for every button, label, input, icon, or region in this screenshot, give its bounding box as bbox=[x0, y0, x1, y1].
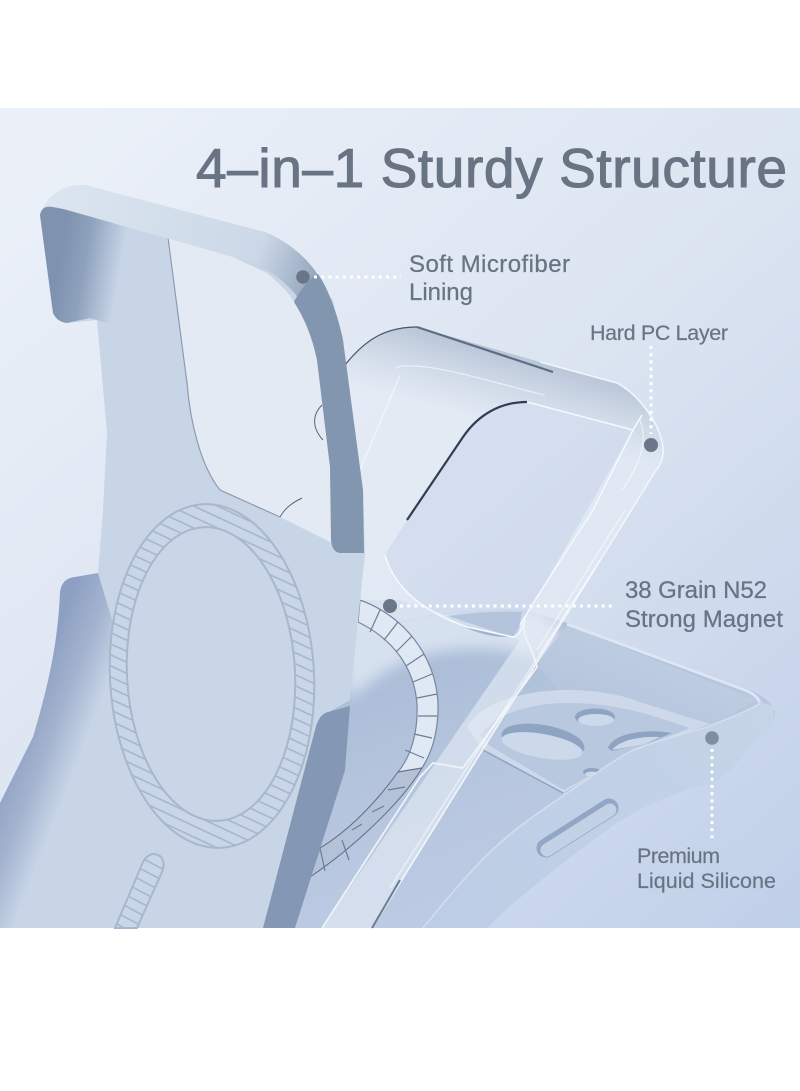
label: liquid silicone: Premium bbox=[637, 844, 720, 868]
clear PC case bbox=[322, 327, 663, 928]
title: 4–in–1 Sturdy Structure bbox=[196, 137, 787, 199]
label: magnet: 38 Grain N52 bbox=[625, 577, 767, 604]
right outer edge bbox=[372, 362, 663, 928]
window opening in lining bbox=[167, 237, 332, 543]
side wall bbox=[537, 625, 757, 750]
camera island bbox=[467, 690, 710, 793]
camera hole: large bbox=[499, 718, 587, 765]
near wall band bbox=[423, 702, 774, 928]
long strip line bbox=[390, 560, 600, 888]
top pocket bbox=[445, 612, 522, 637]
label: liquid silicone bbox=[637, 844, 776, 893]
microfiber lining piece bbox=[0, 185, 365, 928]
upper fold shading bbox=[40, 207, 140, 330]
camera hole: right bbox=[608, 731, 672, 751]
leader: hard PC layer bbox=[644, 346, 658, 452]
window highlights bbox=[385, 402, 642, 637]
lower fold shading bbox=[0, 573, 118, 928]
background panel bbox=[0, 108, 800, 928]
side button bbox=[546, 808, 610, 850]
stadium imprint bbox=[115, 854, 164, 928]
island lower edge bbox=[483, 750, 563, 793]
magnet ring imprint bbox=[101, 499, 323, 853]
dark side band bbox=[294, 274, 364, 553]
label: liquid silicone: Liquid Silicone bbox=[637, 869, 776, 893]
camera island inner bbox=[480, 703, 690, 790]
lower dark band bbox=[263, 706, 350, 928]
lower cutout bbox=[322, 620, 537, 928]
clear frame bbox=[322, 327, 663, 928]
upper magnets bbox=[358, 600, 438, 772]
magnet ring bbox=[310, 600, 438, 877]
label: soft microfiber lining: Soft Microfiber bbox=[409, 251, 570, 278]
dark window edge bbox=[407, 402, 527, 520]
label: soft microfiber lining bbox=[409, 251, 570, 306]
label: magnet bbox=[625, 577, 783, 633]
case interior bbox=[260, 610, 775, 928]
leader: liquid silicone bbox=[705, 731, 719, 838]
lining body bbox=[0, 185, 365, 928]
leader: magnet bbox=[383, 599, 614, 613]
top flange bbox=[43, 185, 318, 300]
inner rim lines bbox=[360, 366, 643, 650]
leader: soft microfiber lining bbox=[296, 270, 401, 284]
clear case seen through window bbox=[280, 405, 323, 517]
window tint bbox=[385, 402, 633, 637]
camera hole: upper bbox=[575, 708, 615, 726]
label: soft microfiber lining: Lining bbox=[409, 279, 473, 306]
back rim bbox=[350, 610, 563, 699]
dark bottom reflection bbox=[372, 880, 400, 928]
dark top edge bbox=[417, 327, 553, 372]
camera hole: small bbox=[583, 768, 601, 776]
outer edge bbox=[345, 327, 417, 365]
label: magnet: Strong Magnet bbox=[625, 606, 783, 633]
rim highlight bbox=[567, 624, 760, 706]
label: hard PC layer: Hard PC Layer bbox=[590, 321, 728, 345]
lower magnets bbox=[310, 768, 422, 877]
infographic canvas bbox=[0, 108, 800, 929]
magnet ticks bbox=[320, 610, 437, 871]
silicone case bbox=[260, 604, 775, 928]
near wall lip bbox=[423, 704, 760, 928]
window edge bbox=[168, 238, 280, 517]
